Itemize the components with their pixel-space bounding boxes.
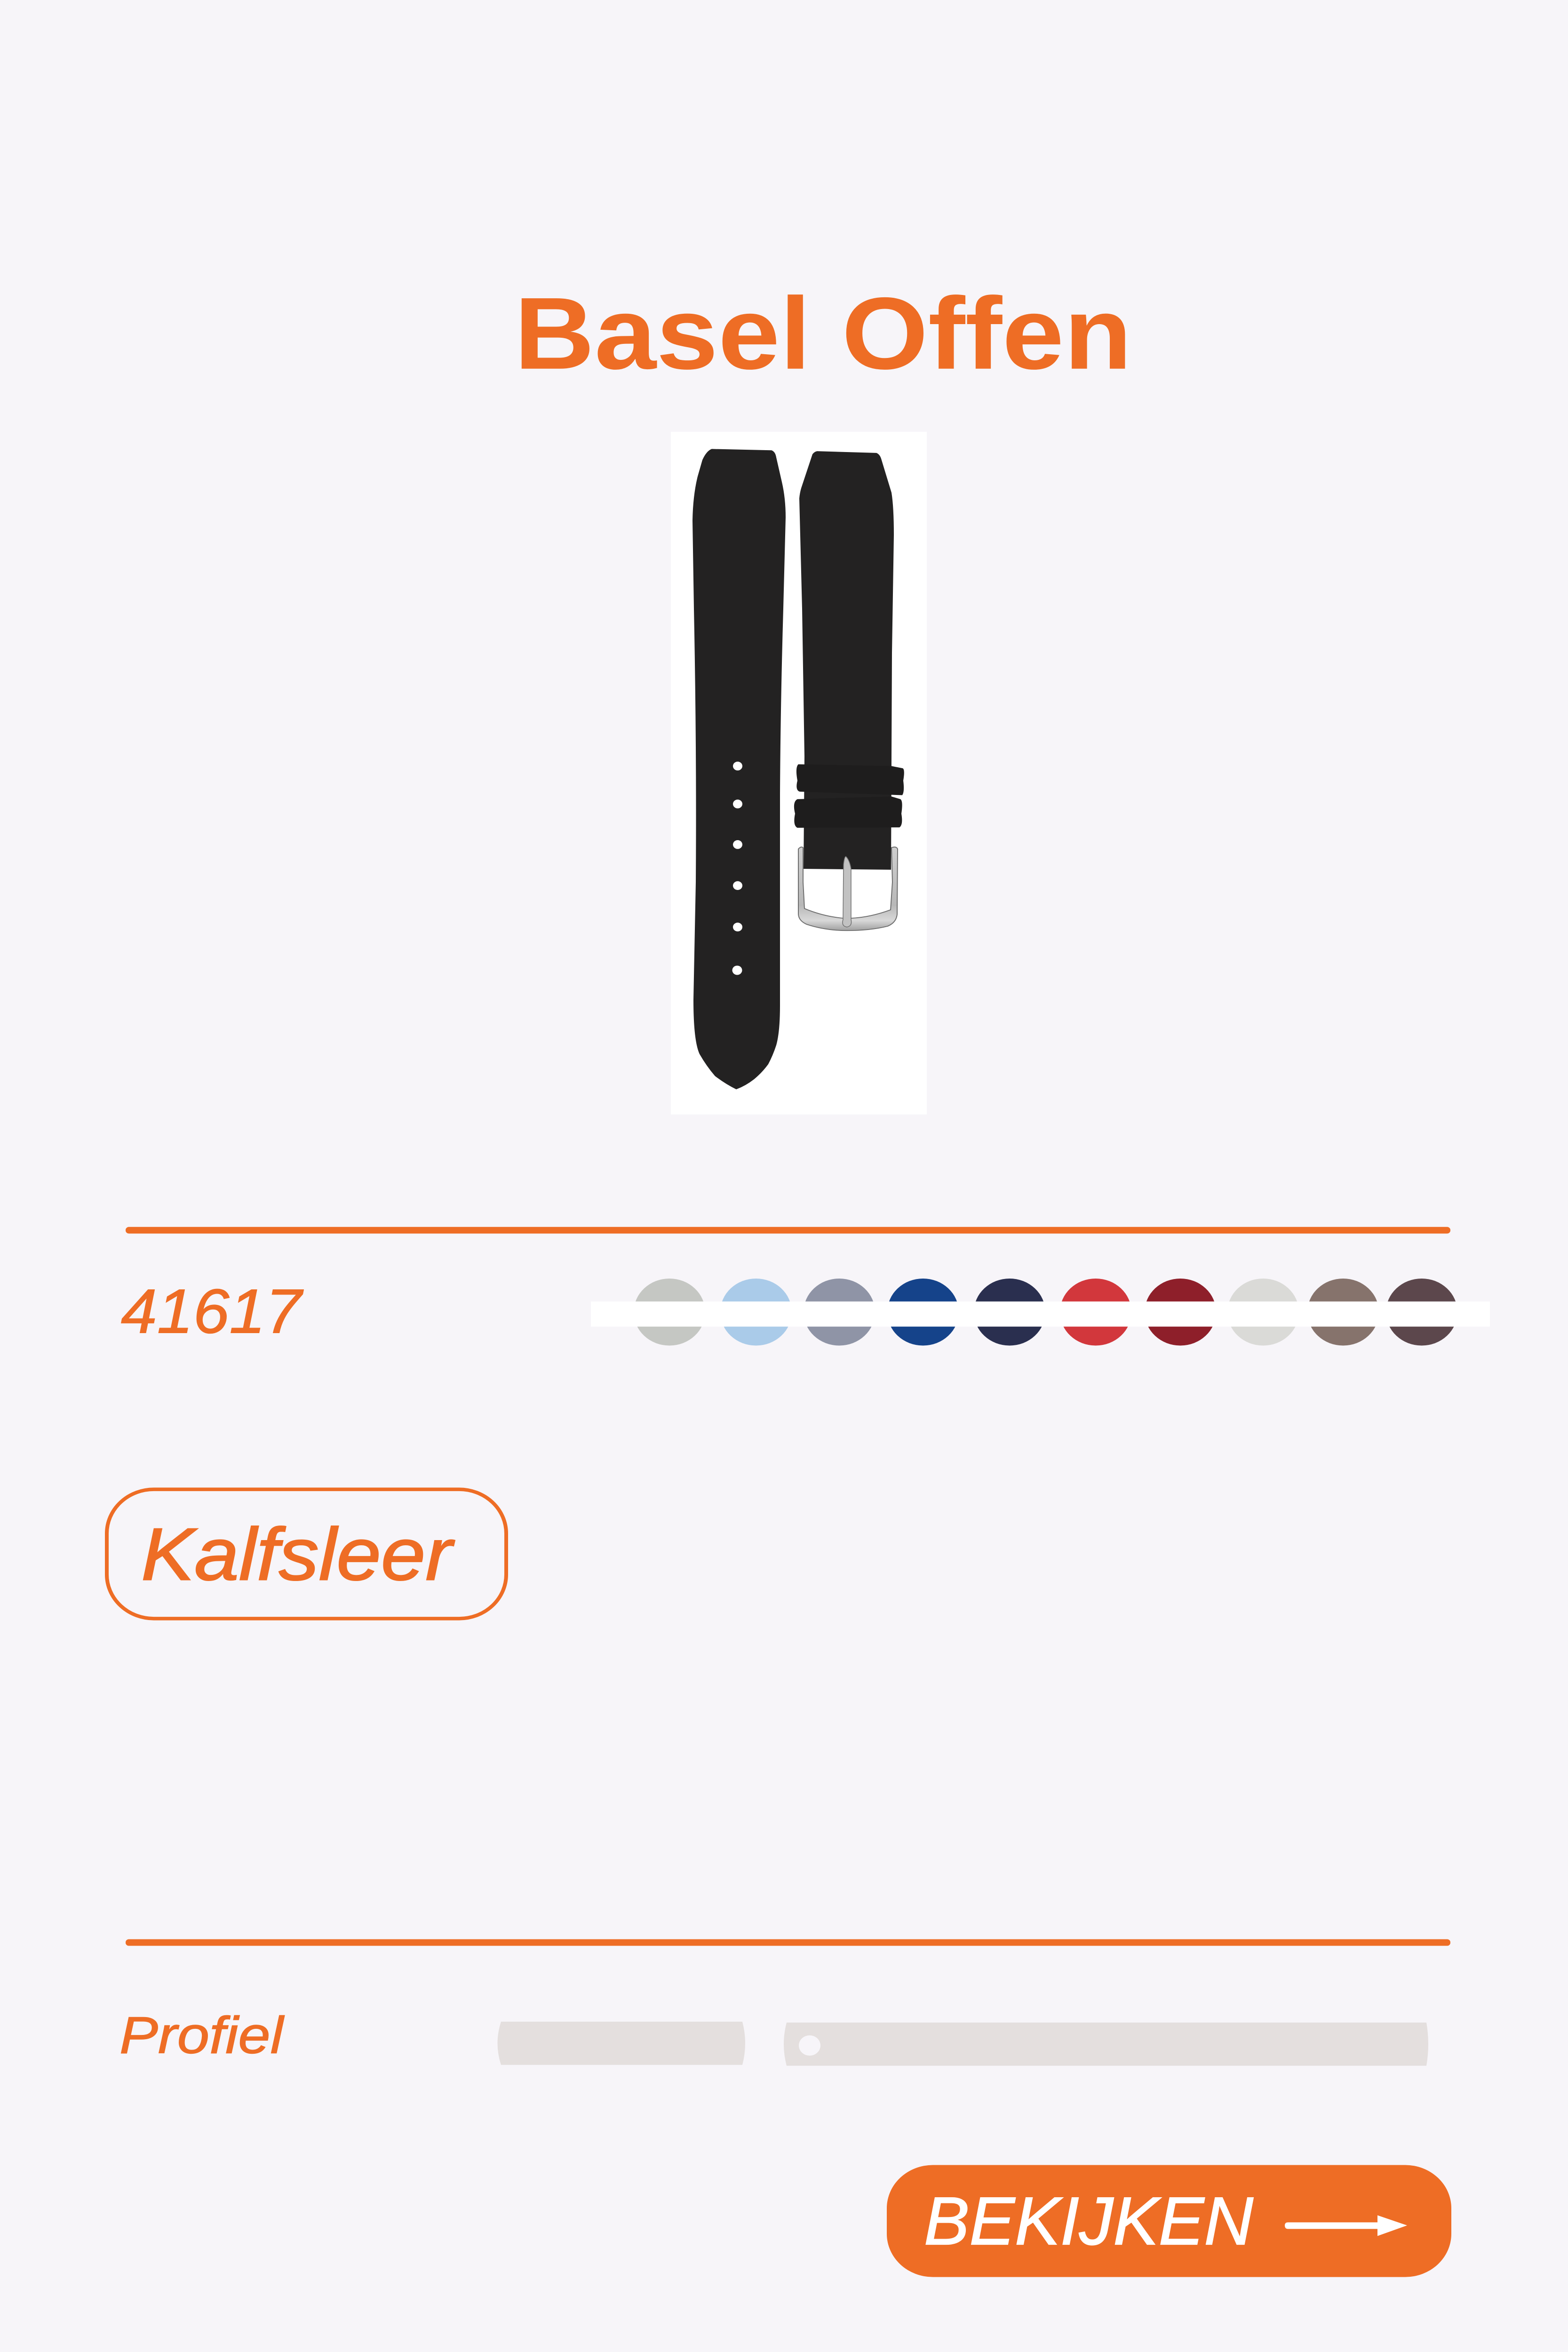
button: Bekijken: BEKIJKEN — [924, 2183, 1253, 2259]
short strap piece with buckle — [794, 451, 904, 930]
strap loop 2 — [794, 796, 902, 828]
material tag: Kalfsleer — [107, 1489, 506, 1619]
button: Bekijken — [887, 2165, 1451, 2277]
profile hole — [799, 2035, 820, 2056]
icon: arrow — [1285, 2215, 1407, 2236]
divider — [126, 1939, 1450, 1946]
strap holes — [732, 762, 742, 975]
profile short segment — [498, 2022, 745, 2065]
title: Basel Offen — [514, 276, 1132, 390]
product image: watch strap — [671, 432, 927, 1114]
colour swatches — [591, 1279, 1490, 1345]
strap body — [799, 451, 894, 870]
product number: 41617 — [121, 1276, 303, 1346]
material tag: Kalfsleer: Kalfsleer — [141, 1513, 455, 1596]
long strap piece — [692, 449, 786, 1089]
buckle tongue — [843, 857, 852, 927]
profile label: Profiel — [119, 2006, 285, 2065]
strap loop 1 — [796, 764, 904, 795]
divider — [126, 1227, 1450, 1233]
image background — [671, 432, 927, 1114]
buckle — [798, 847, 898, 930]
profile long segment — [784, 2023, 1428, 2066]
white band over swatches — [591, 1302, 1490, 1327]
profile diagram — [498, 2022, 1428, 2066]
